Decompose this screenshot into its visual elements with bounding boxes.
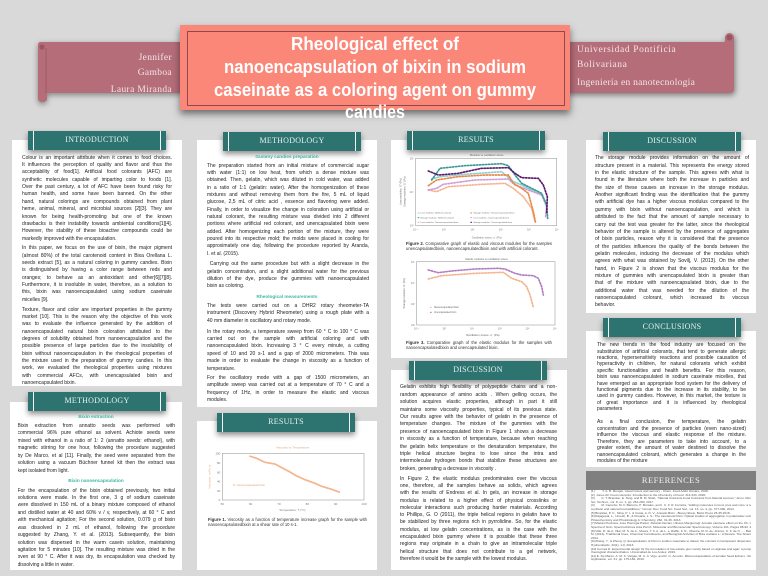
text: discussion right column: gummy with bixin without nanoencapsulation, and which is [595, 207, 749, 213]
chart: viscosity vs temperature: 60 [217, 470, 221, 474]
text: discussion right column: of the particles influences the quality of the bonds between the [595, 244, 749, 250]
text: introduction paragraph 1: Colour is an important attribute when it comes to food choices. [22, 155, 172, 161]
text: discussion right column: behavior. [595, 302, 615, 308]
text: rheological paragraph 2: speed of 10 and 20 s-1 and a gap of 2000 micrometers. This was [207, 351, 369, 357]
title text: caseinate as a coloring agent on gummy [214, 79, 537, 100]
text: bixin extraction: by De Marco. et al [11]. Finally, the seed were separated from the [18, 453, 175, 459]
chart: viscosity vs temperature: 0 [219, 498, 221, 502]
chart: elastic modulus vs oscillation stress: 10⁴ [411, 281, 416, 285]
text: discussion right column: that of the mixture with nanoencapsulated bixin, due to the [595, 280, 749, 286]
text: introduction paragraph 1: Over the past century, a lot of AFC have been found risky for [22, 184, 172, 190]
text: conclusions paragraph 1: hyperactivity in children, for natural colorants which exhibit [597, 361, 746, 367]
text: gummy preparation paragraph 2: dilution of the dye, produce the gummies with nanoencapsulated [207, 276, 369, 282]
text: discussion paragraph 2: be stabilized by three regions rich in pyrrolidine. So, for the elastic [400, 519, 557, 525]
text: bixin nanoencapsulation: dissolving a little in water. [18, 562, 74, 568]
chart: viscosity vs temperature: 100 [215, 452, 221, 456]
text: introduction paragraph 3: was to evaluate the influence generated by the addition of [22, 321, 172, 327]
panel: results figures 2 and 3 [391, 131, 567, 358]
text: conclusions paragraph 2: Therefore, they are parameters to take into account, to a [597, 439, 746, 445]
text: bixin nanoencapsulation: solution was dispersed in the warm casein solution, maintaining [18, 540, 175, 546]
text: discussion paragraph 2: with the results of Endress et al. In gels, an increase in storage [400, 490, 557, 496]
text: rheological paragraph 1: 40 mm diameter in oscillatory and rotary mode. [207, 318, 311, 324]
chart: viscosity vs temperature: 20 [217, 489, 221, 493]
university text: Bolivariana [577, 60, 627, 70]
chart: modulus vs oscillation stress: 10⁻¹ [413, 227, 418, 231]
text: gummy preparation paragraph 1: I. et al. (2015). [207, 251, 239, 257]
text: conclusions paragraph 1: The new trends in the food industry are focused on the [597, 342, 746, 348]
text: rheological paragraph 3 [207, 375, 369, 403]
text: introduction paragraph 3: bixin without nanoencapsulation in the rheological properties of [22, 351, 172, 357]
text: introduction paragraph 3: the mixture used in the preparation of gummy candies. In this [22, 358, 172, 364]
text: conclusions paragraph 2: As a final conclusion, the temperature, the gelatin [597, 419, 746, 425]
chart: modulus vs oscillation stress: 10³ [410, 224, 414, 228]
author names: Laura Miranda [111, 84, 172, 94]
text: bixin nanoencapsulation [18, 488, 175, 568]
text: gummy preparation paragraph 1: natural colorant, the resulting mixture was divided into 2 different [207, 214, 369, 220]
chart: elastic modulus vs oscillation stress: 10³ [411, 302, 415, 306]
text: gummy preparation paragraph 1: added. After homogenizing each portion of the mixture, they were [207, 229, 369, 235]
chart: viscosity vs temperature: Viscosity: η (Pa·s) [207, 465, 211, 489]
text: discussion right column: found in the literature where both the increase in particles and [595, 177, 749, 183]
title text [214, 33, 537, 122]
text: conclusions paragraph 1: reactions, hypersensitivity reactions and possible causation of [597, 355, 746, 361]
chart: elastic modulus vs oscillation stress: 10⁰ [442, 327, 447, 331]
text: discussion paragraph 1: maintains some viscosity properties, typical of its previous state. [400, 407, 557, 413]
text: discussion right column: in the elastic structure of the sample. This agrees with what is [595, 170, 749, 176]
text: gummy preparation paragraph 1: obtained. Then, gelatin, which was diluted in cold water, was added [207, 177, 369, 183]
university text: Universidad Pontificia [577, 45, 676, 55]
heading: results [217, 413, 355, 432]
text: introduction paragraph 1 [22, 155, 172, 242]
text: introduction paragraph 1: human health, and some have been banned. On the other [22, 191, 172, 197]
text: rheological paragraph 2: temperature. [207, 366, 235, 372]
chart: viscosity vs temperature: 50 [221, 502, 224, 506]
chart: viscosity vs temperature: 90 [334, 502, 338, 506]
text: discussion right column: carry out the test was greater for the latter, since the rheological [595, 222, 749, 228]
chart: elastic modulus vs oscillation stress: 10⁴ [553, 327, 558, 331]
chart: elastic modulus vs oscillation stress: 10² [498, 327, 502, 331]
text: gummy preparation paragraph 2: gelatin concentration, and a slight additional water for the previous [207, 269, 369, 275]
text: introduction paragraph 2: this, bixin was nanoencapsulated using sodium caseinate [22, 289, 172, 295]
chart: viscosity vs temperature: 60 [249, 502, 253, 506]
panel: discussion center [391, 361, 567, 570]
chart: elastic modulus vs oscillation stress: 10³ [525, 327, 529, 331]
chart: elastic modulus vs oscillation stress: 10² [411, 323, 415, 327]
text: discussion paragraph 2: In Figure 2, the elastic modulus predominates over the viscous [400, 476, 557, 482]
text: introduction paragraph 3: nanoencapsulated bixin. [22, 380, 76, 386]
text: discussion right column: structure present in a material. This represents the energy stored [595, 163, 749, 169]
text: bixin nanoencapsulation: suggested by Zhang, Y. et al. (2013). Subsequently, the bixin [18, 532, 175, 538]
text: rheological paragraph 2 [207, 329, 369, 372]
panel: results figure 1 [197, 413, 377, 570]
text: introduction paragraph 1: hand, natural colorings are compounds obtained from plant [22, 199, 172, 205]
text: introduction paragraph 2: (almost 80%) of the total carotenoid content in Bixa Orellana L. [22, 253, 172, 259]
text: conclusions paragraph 2 [597, 419, 746, 464]
text: discussion right column: nanoencapsulated colorant, which increased its viscous [595, 295, 749, 301]
title text: nanoencapsulation of bixin in sodium [224, 56, 526, 77]
text: discussion right column: attributed to the fact that the amount of sample necessary to [595, 214, 749, 220]
text: introduction paragraph 2 [22, 245, 172, 303]
text: rheological paragraph 1: The tests were carried out on a DHR2 rotary rheometer-TA [207, 303, 369, 309]
text: introduction paragraph 1: synthetic molecules capable of imparting color to foods [1]. [22, 177, 172, 183]
text: introduction paragraph 1: It influences the perception of quality and flavor and thus the [22, 162, 172, 168]
text: discussion paragraph 1: solution acquires elastic properties, although in part it still [400, 399, 557, 405]
text: introduction paragraph 3: with commercial AFCs, with unencapsulated bixin and [22, 373, 172, 379]
heading: methodology [28, 392, 166, 411]
text: conclusions paragraph 2: influence the viscous and elastic response of the mixture. [597, 432, 746, 438]
chart: elastic modulus vs oscillation stress: 10⁻¹ [414, 327, 419, 331]
chart: viscosity vs temperature: 80 [306, 502, 309, 506]
text: introduction paragraph 3: work, we evaluated the rheological properties using mixtures [22, 365, 172, 371]
author names [111, 52, 172, 94]
text: discussion paragraph 1: Our results agree with the behavior of gelatin in the presence of [400, 414, 557, 420]
text: gummy preparation paragraph 1: with water (1:1) on low heat, from which a dense mixture was [207, 170, 369, 176]
author names: Gamboa [138, 68, 172, 78]
text: reference list [591, 490, 751, 561]
text: bixin nanoencapsulation: agitation for 5 minutes [10]. The resulting mixture was dried in the [18, 547, 175, 553]
chart: modulus vs oscillation stress: Loss modulus : Artificial colorant [420, 212, 452, 215]
text: conclusions paragraph 1: substitution of artificial colorants, that tend to generate allergic [597, 349, 746, 355]
text: discussion paragraph 2: encapsulated bixin gummy where it is possible that these three [400, 534, 557, 540]
text: introduction paragraph 1: However, the stability of these bioactive compounds could be [22, 228, 172, 234]
chart: viscosity vs temperature: Viscosity vs Temperature [276, 446, 310, 450]
subheading: gummy candies preparation: Gummy candies preparation [255, 154, 319, 158]
heading: references [586, 471, 756, 490]
chart: modulus vs oscillation stress: 10¹ [470, 227, 474, 231]
text: discussion right column [595, 155, 749, 308]
panel: references [586, 471, 756, 570]
text: rheological paragraph 1 [207, 303, 369, 324]
text: bixin nanoencapsulation: oven at 90 ° C. After it was dry, its encapsulation was checked by [18, 554, 175, 560]
chart: elastic modulus vs oscillation stress: Unencapsulated bixin [434, 311, 457, 314]
heading: introduction [28, 131, 166, 150]
text: rheological paragraph 2: carried out on the sample with artificial coloring and with [207, 336, 369, 342]
chart: viscosity vs temperature: 40 [217, 480, 221, 484]
subheading: rheological measurements: Rheological measurements [257, 294, 317, 298]
text: discussion right column: with artificial dye has a higher viscous modulus compared to the [595, 199, 749, 205]
text: bixin extraction: kept isolated from light. [18, 468, 69, 474]
heading: results [407, 131, 545, 150]
heading: discussion: DISCUSSION [453, 365, 503, 374]
text: gummy preparation paragraph 2 [207, 261, 369, 289]
chart: modulus vs oscillation stress: Storage modulus: G´ (Pa) [402, 176, 406, 207]
caption: figure 1: Figure 1. Viscosity as a function of temperature increase graph for the sample with [208, 517, 367, 522]
chart: elastic modulus vs oscillation stress [402, 257, 558, 337]
text: gummy preparation paragraph 1: glucose, 2,5 mL of citric acid , essence and flavoring were added. [207, 199, 369, 205]
text: discussion right column: The storage module provides information on the amount of [595, 155, 749, 161]
text: discussion paragraph 1: random appearance of amino acids . When gelling occurs, the [400, 392, 557, 398]
chart: elastic modulus vs oscillation stress: Oscillation stress: σ´ (Pa) [466, 333, 500, 337]
university text: Ingeniería en nanotecnología [577, 78, 695, 88]
text: discussion paragraph 1 [400, 384, 557, 472]
text: introduction paragraph 1: acceptability of food[1]. Artificial food colorants (AFC) are [22, 169, 172, 175]
chart: modulus vs oscillation stress: 10³ [527, 227, 531, 231]
chart: elastic modulus vs oscillation stress: Storage modulus: G´ (Pa) [402, 278, 406, 308]
text: discussion right column: agrees with what was obtained by Sovilj, V. (2013). On the other [595, 258, 749, 264]
text: rheological paragraph 3: amplitude sweep was carried out at a temperature of 70 ° C and a [207, 382, 369, 388]
heading: discussion: DISCUSSION [647, 136, 697, 145]
text: bixin nanoencapsulation: solutions were made. In the first one, 3 g of sodium caseinate [18, 495, 175, 501]
text: conclusions paragraph 1: have emerged as an appropriate food system for the delivery of [597, 381, 746, 387]
caption: figure 1 [208, 517, 367, 527]
text: rheological paragraph 1: instrument (Discovery Hybrid Rheometer) using a rough plate with a [207, 310, 369, 316]
text: gummy preparation paragraph 1 [207, 163, 369, 257]
text: bixin extraction: commercial 96% pure ethanol as solvent. Achiote seeds were [18, 430, 175, 436]
text: rheological paragraph 3: modules. [207, 397, 227, 403]
caption: figure 2: unencapsulatedbixin, nanoencapsulatedbixin and with artificial colorant. [406, 246, 539, 250]
text: conclusions paragraph 1: parameters [597, 406, 622, 412]
text: introduction paragraph 3: possible presence of large particles due to the insolubility of [22, 343, 172, 349]
chart: modulus vs oscillation stress: Modulus vs oscillation stress [470, 153, 504, 157]
text: introduction paragraph 2: In this paper, we focus on the use of bixin, the major pigment [22, 245, 172, 251]
chart: modulus vs oscillation stress: Loss modulus : Unencapsulated bixin [473, 216, 510, 219]
text: introduction paragraph 3: market [10]. This is the reason why the objective of this work [22, 314, 172, 320]
text: discussion right column: gelatin molecules, inducing the decrease of the modulus which [595, 251, 749, 257]
text: discussion right column: additional water that was needed for the dilution of the [595, 288, 749, 294]
text: discussion paragraph 2: helical structure that does not contribute to a gel network, [400, 549, 557, 555]
text: discussion right column: hand, in Figure 2 is shown that the viscous modulus for the [595, 266, 749, 272]
heading: conclusions: CONCLUSIONS [643, 322, 701, 331]
chart: modulus vs oscillation stress: Loss modulus: G″ (Pa) [398, 178, 402, 205]
panel: methodology candies and rheology [197, 132, 377, 407]
caption: figure 3: Figure 3. Comparative graph of the elastic modulus for the samples with [406, 340, 552, 344]
heading: discussion [409, 361, 547, 380]
subheading: bixin extraction: Bixin extraction [78, 414, 114, 418]
heading: discussion [603, 132, 741, 151]
text: gummy preparation paragraph 1: in a ratio of 1:1 (gelatin: water). After the homogenization of these [207, 185, 369, 191]
text: bixin extraction: mixed with ethanol in a ratio of 1: 2 (annatto seeds: ethanol), with [18, 438, 175, 444]
text: introduction paragraph 1: drawbacks is their instability towards ambiental conditions[1][4]. [22, 221, 172, 227]
text: bixin nanoencapsulation: was dissolved in 2 mL of ethanol, following the procedure [18, 525, 175, 531]
ribbon: university [570, 32, 739, 99]
text: gummy preparation paragraph 2: Carrying out the same procedure but with a slight decrease in the [210, 261, 369, 267]
text: gummy preparation paragraph 1: approximately one day, following the procedure reported by Aranda, [207, 243, 369, 249]
chart: viscosity vs temperature [207, 446, 367, 512]
chart: elastic modulus vs oscillation stress: Elastic modulus vs oscillation stress [466, 257, 508, 261]
chart: elastic modulus vs oscillation stress: Nanoencapsulated bixin [434, 306, 460, 309]
chart: viscosity vs temperature: Nanoencapsulated bixin [237, 483, 266, 487]
panel: methodology extraction [10, 392, 182, 570]
text: discussion paragraph 2: modulus, at low gelatin concentrations, as is the case with the [400, 527, 557, 533]
text: gummy preparation paragraph 1: poured into its respective mold; the molds were placed in cooling for [207, 236, 369, 242]
text: conclusions paragraph 1: bixin was nanoencapsulated in sodium caseinate micelles, that [597, 374, 746, 380]
text: conclusions paragraph 1: of great importance and it is influenced by rheological [597, 400, 746, 406]
chart: modulus vs oscillation stress: 10⁰ [442, 227, 447, 231]
heading: results: RESULTS [268, 417, 304, 426]
text: candies [345, 101, 405, 122]
chart: viscosity vs temperature: 100 [361, 502, 367, 506]
text: discussion right column: mixture of gummies with unencapsulated bixin is greater than [595, 273, 749, 279]
text: conclusions paragraph 1: used in gummy candies. However, in this market, the texture is [597, 393, 746, 399]
ribbon: authors [34, 40, 180, 108]
text: introduction paragraph 3: nanoencapsulated natural bixin coloration attributed to the [22, 329, 172, 335]
text: conclusions paragraph 1 [597, 342, 746, 412]
heading: references: REFERENCES [642, 475, 700, 485]
caption: figure 2 [406, 240, 552, 251]
caption: figure 1: nanoencapsulatedbixin at a shear rate of 10 s-1. [208, 522, 298, 527]
text: bixin nanoencapsulation: with mechanical agitation; For the second solution, 0.079 g of bixin [18, 517, 175, 523]
text: discussion paragraph 1: intermolecular hydrogen bonds that stabilize these structures are [400, 458, 557, 464]
text: discussion paragraph 1: in viscosity as a function of temperature, because when reaching [400, 436, 557, 442]
text: discussion paragraph 1: the gelatin helix temperature or the denaturation temperature, the [400, 444, 557, 450]
panel: introduction [12, 131, 182, 386]
chart: modulus vs oscillation stress: Oscillation stress: σ´ (Pa) [472, 235, 502, 239]
text: introduction paragraph 1: heme, animal, mineral, and microbial sources [2][3]. They are [22, 206, 172, 212]
text: discussion paragraph 1: temperature changes. The mixture of the gummies with the [400, 421, 557, 427]
text: discussion paragraph 1: triple helical structure begins to lose since the intra and [400, 451, 557, 457]
chart: modulus vs oscillation stress: Loss modulus : Nanoencapsulated bixin [420, 221, 459, 224]
chart: elastic modulus vs oscillation stress: 10¹ [470, 327, 474, 331]
chart: modulus vs oscillation stress: 10⁴ [410, 190, 415, 194]
text: discussion paragraph 2 [400, 476, 557, 562]
text: introduction paragraph 2: Furthermore, it is insoluble in water, therefore, as a solution to [22, 282, 172, 288]
text: introduction paragraph 3 [22, 307, 172, 386]
title box [180, 25, 570, 110]
text: conclusions paragraph 1: functional pigments due to the increase in its stability, to be [597, 387, 746, 393]
text: introduction paragraph 1: markedly improved with the encapsulation. [22, 236, 116, 242]
text: discussion paragraph 2: modulus is related to a higher effect of physical crosslinks or [400, 498, 557, 504]
chart: modulus vs oscillation stress: 10⁴ [555, 227, 560, 231]
panel: conclusions [586, 318, 756, 467]
text: conclusions paragraph 1: specific functionalities and health benefits. For this reason, [597, 368, 746, 374]
text: gummy preparation paragraph 1: The preparation started from an initial mixture of commercial sugar [207, 163, 369, 169]
text: conclusions paragraph 2: nanoencapsulated colorant, which generates a change in the [597, 452, 746, 458]
text: discussion paragraph 2: regions may originate in a chain to give an intramolecular triple [400, 541, 557, 547]
text: discussion right column: behavior of the sample is altered by the presence of aggregates [595, 229, 749, 235]
text: rheological paragraph 3: For the oscillatory mode with a gap of 1500 micrometers, an [207, 375, 369, 381]
heading: conclusions [603, 318, 741, 337]
heading: introduction: INTRODUCTION [65, 135, 129, 144]
text: introduction paragraph 3: degrees of solubility obtained from nanoencapsulation and the [22, 336, 172, 342]
text: gummy preparation paragraph 1: Finally, in order to visualize the change in coloration using artificial or [207, 207, 369, 213]
text: conclusions paragraph 2: modules of the mixture [597, 458, 648, 464]
university text [577, 45, 695, 88]
chart: viscosity vs temperature: 70 [277, 502, 281, 506]
text: discussion right column: of bixin particles, reason why it is considered that the presence [595, 236, 749, 242]
text: gummy preparation paragraph 2: bixin as coloring. [207, 283, 244, 289]
text: gummy preparation paragraph 1: mixtures and without removing them from the fire, 5 mL of liquid [207, 192, 369, 198]
text: discussion paragraph 2: one, therefore, all the samples behave as solids, which agrees [400, 483, 557, 489]
chart: modulus vs oscillation stress: Storage modulus : Artificial colorant [420, 216, 455, 219]
heading: methodology: METHODOLOGY [65, 396, 129, 405]
text: introduction paragraph 2: micelles [9]. [22, 297, 48, 303]
chart: viscosity vs temperature: 80 [217, 461, 221, 465]
text: introduction paragraph 2: is distinguished by having a color range between reds and [22, 267, 172, 273]
text: introduction paragraph 2: seeds extract [5], as a natural coloring in gummy candies. Bixin [22, 260, 172, 266]
text: rheological paragraph 2: nanoencapsulated bixin. Increasing 3 ° C every minute, a cutting [207, 343, 369, 349]
chart: modulus vs oscillation stress: 10⁵ [410, 157, 414, 161]
chart: modulus vs oscillation stress: 10² [499, 227, 503, 231]
text: rheological paragraph 3: frequency of 1Hz, in order to measure the elastic and viscous [207, 390, 369, 396]
text: conclusions paragraph 2: concentration and the presence of particles (even nano-sized) [597, 426, 746, 432]
chart: viscosity vs temperature: Temperature: T (°C) [279, 508, 306, 512]
caption: figure 3: nanoencapsulatedbixin and unencapsulated bixin. [406, 344, 499, 350]
text: discussion paragraph 2: molecular interactions such producing harder materials. According [400, 505, 557, 511]
text: bixin extraction [18, 423, 175, 474]
text: rheological paragraph 2: In the rotary mode, a temperature sweep from 60 ° C to 100 ° C was [207, 329, 369, 335]
text: bixin nanoencapsulation: were dissolved in 150 mL of a binary mixture composed of ethanol [18, 502, 175, 508]
text: bixin extraction: Bixin extraction from annatto seeds was performed with [18, 423, 175, 429]
text: discussion right column: Another significant finding was the identification that the gummy [595, 192, 749, 198]
text: bixin extraction: solution using a vacuum Büchner funnel kit then the extract was [18, 460, 175, 466]
text: bixin extraction: magnetic stirring for one hour, following the procedure suggested [18, 445, 175, 451]
text: discussion paragraph 1: Gelatin exhibits high flexibility of polypeptide chains and a non- [400, 384, 557, 390]
subheading: bixin nanoencapsulation: Bixin nanoencapsulation [68, 478, 124, 482]
heading: methodology: METHODOLOGY [260, 136, 324, 145]
text: conclusions paragraph 2: greater extent, the amount of water destined to dissolve the [597, 445, 746, 451]
text: introduction paragraph 3: Texture, flavor and color are important properties in the gummy [22, 307, 172, 313]
chart: modulus vs oscillation stress: Storage modulus : Unencapsulated bixin [473, 221, 513, 224]
panel: discussion right [586, 132, 756, 313]
text: rheological paragraph 2: made in order to evaluate the change in viscosity as a function of [207, 358, 369, 364]
text: discussion paragraph 1: broken, generating a decrease in viscosity . [400, 466, 496, 472]
text: bixin nanoencapsulation: For the encapsulation of the bixin obtained previously, two initial [18, 488, 175, 494]
chart: modulus vs oscillation stress [398, 153, 560, 239]
text: gummy preparation paragraph 1: portions where artificial red colorant, and unencapsulated bixin were [207, 221, 369, 227]
text: discussion right column: the size of these causes an increase in the storage modulus. [595, 185, 749, 191]
text: introduction paragraph 1: known for being health-promoting but one of the known [22, 214, 172, 220]
text: discussion paragraph 1: presence of nanoencapsulated bixin in Figure 1 shows a decrease [400, 429, 557, 435]
title text: Rheological effect of [291, 33, 460, 54]
text: discussion paragraph 2: therefore it would be the sample with the lowest modulus. [400, 556, 527, 562]
heading: results: RESULTS [458, 135, 494, 144]
chart: modulus vs oscillation stress: Storage modulus : Nanoencapsulated bixin [473, 212, 515, 215]
heading: methodology [223, 132, 361, 151]
caption: figure 3 [406, 340, 552, 350]
text: bixin nanoencapsulation: and distilled water at 40 and 60% v / v, respectively, at 60 ° C and [18, 510, 175, 516]
chart: elastic modulus vs oscillation stress: 10⁵ [411, 260, 415, 264]
text: discussion paragraph 2: to Phillips, G. O (2011), the triple helical regions in gelatin have to [400, 512, 557, 518]
author names: Jennifer [139, 52, 172, 62]
text: introduction paragraph 2: oranges; to behave as an antioxidant and other[6][7][8]. [22, 275, 172, 281]
